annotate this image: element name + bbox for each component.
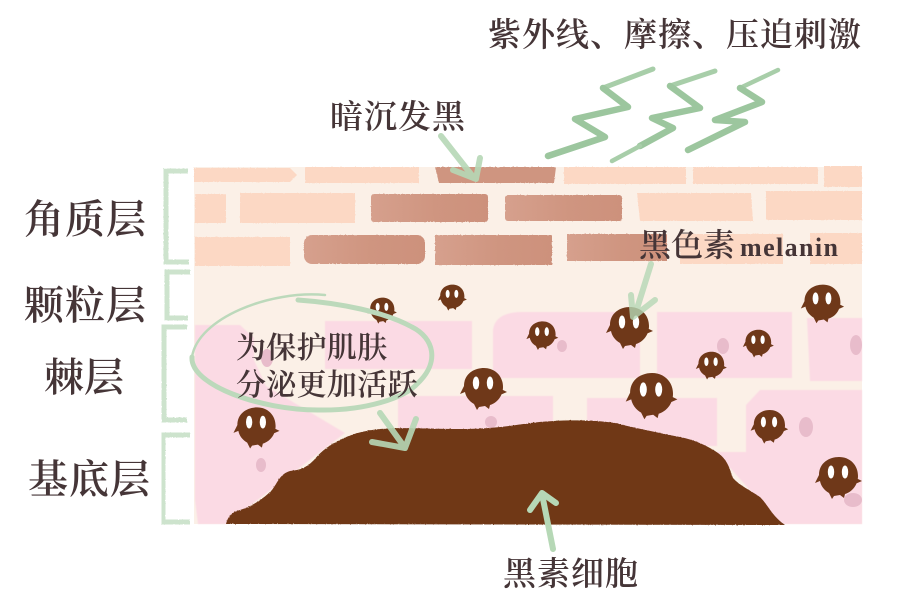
arrow: melanocyte <box>530 493 556 549</box>
callout text <box>236 331 418 402</box>
callout ring <box>192 294 432 410</box>
panel: skin cross-section <box>194 166 862 524</box>
arrow: activity <box>372 413 416 448</box>
arrow: melanin <box>631 264 655 317</box>
layer brackets <box>163 171 190 522</box>
label: stratum granulosum: 颗粒层 <box>24 283 147 328</box>
label: stratum spinosum: 棘层 <box>44 355 125 400</box>
stratum spinosum pink cells <box>195 312 862 524</box>
label: melanin: 黑色素melanin <box>639 227 839 263</box>
label: melanocyte: 黑素细胞 <box>503 556 639 593</box>
heading: stimuli: 紫外线、摩擦、压迫刺激 <box>488 17 862 54</box>
icon: irritation zigzags <box>548 69 778 161</box>
label: stratum basale: 基底层 <box>28 457 151 502</box>
callout text: 分泌更加活跃 <box>236 369 418 402</box>
label: stratum corneum: 角质层 <box>24 197 147 242</box>
callout text: 为保护肌肤 <box>236 331 388 365</box>
stratum corneum bricks <box>194 166 862 266</box>
label: darkening: 暗沉发黑 <box>330 99 466 136</box>
pink blotches <box>256 335 862 507</box>
melanocyte mound <box>226 420 785 525</box>
melanin granules <box>233 285 862 499</box>
arrow: darkened cells <box>441 136 480 179</box>
